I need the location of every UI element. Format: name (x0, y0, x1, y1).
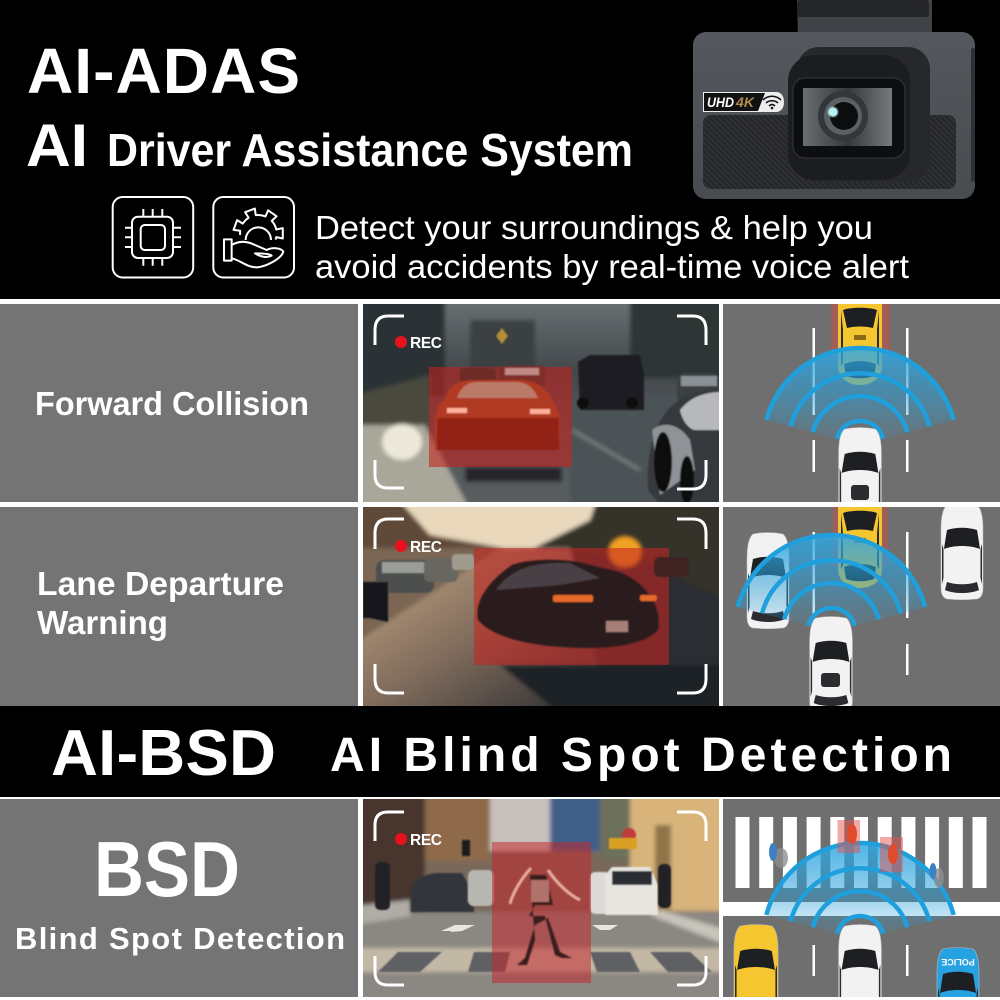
photo: rainy road forward collision (363, 304, 719, 502)
REC indicator: REC (410, 832, 442, 849)
icon: AI chip (113, 197, 193, 278)
UHD 4K label (703, 92, 784, 112)
lane markers (812, 328, 908, 472)
lane markers (812, 945, 908, 976)
orange glow (608, 536, 642, 568)
viewfinder corners (375, 316, 706, 489)
dark SUV (577, 355, 719, 410)
white car (810, 616, 852, 713)
diagram: blind spot detection (723, 799, 1000, 1000)
radar fan (738, 535, 925, 626)
radar fan (766, 348, 954, 439)
red car (435, 380, 560, 450)
dash cam product image (693, 0, 975, 199)
zebra crossing (736, 817, 986, 888)
lane markers (812, 532, 908, 675)
white car (839, 924, 881, 1000)
road arrows (441, 925, 618, 932)
REC indicator (395, 540, 442, 552)
subtitle (26, 112, 633, 179)
yellow car ahead (838, 502, 882, 588)
panel: lane departure label (0, 507, 358, 706)
photo: sunset road lane departure (363, 507, 719, 706)
REC indicator: REC (410, 335, 442, 352)
viewfinder corners (375, 519, 706, 693)
stop line (723, 902, 1000, 916)
panel: BSD label (0, 799, 358, 997)
dark car (477, 560, 659, 648)
photo: pedestrian crossing street (355, 791, 727, 1000)
icon: hand holding gear (213, 197, 294, 278)
REC indicator (395, 832, 442, 849)
title: AI-ADAS: AI-ADAS (27, 35, 300, 107)
pedestrians highlighted red (838, 820, 903, 872)
description line 2: avoid accidents by real-time voice alert (315, 248, 909, 285)
distant cars in box (460, 366, 545, 386)
street signs (462, 828, 637, 856)
radar fan (766, 843, 954, 934)
detection box: red overlay (492, 842, 591, 983)
diagram: forward collision (723, 304, 1000, 502)
viewfinder corners (375, 812, 706, 985)
photo scene (363, 304, 719, 502)
police car (937, 948, 979, 1000)
description line 1: Detect your surroundings & help you (315, 209, 873, 246)
road sign (496, 328, 508, 344)
subtitle: Driver Assistance System: Driver Assistance System (107, 124, 633, 176)
band subtitle: AI Blind Spot Detection (330, 729, 952, 782)
hatched lower panel (703, 115, 956, 189)
parked cars (411, 867, 658, 915)
pedestrians blue (769, 843, 944, 888)
panel: lane departure label: Warning (37, 604, 168, 641)
pedestrian (510, 868, 580, 965)
panel: forward collision label: Forward Collision (35, 385, 309, 422)
white car on right (941, 504, 983, 600)
UHD 4K label: 4K (735, 94, 755, 110)
band: AI-BSD heading (0, 706, 1000, 797)
panel: forward collision label (0, 304, 358, 502)
silver sports car (648, 390, 722, 505)
warning zone around yellow car (833, 507, 888, 567)
photo scene (363, 507, 719, 706)
small car (654, 557, 689, 577)
subtitle: AI: AI (26, 112, 88, 179)
yellow car ahead (838, 299, 882, 385)
parked cars (363, 554, 474, 622)
description text (315, 209, 909, 285)
lens (818, 91, 868, 141)
diagram: lane departure (723, 502, 1000, 713)
police car: POLICE (941, 957, 975, 967)
yellow car (734, 924, 778, 1000)
band title: AI-BSD: AI-BSD (51, 716, 276, 789)
photo scene (355, 791, 727, 1000)
top header panel (0, 0, 1000, 299)
REC indicator (395, 336, 442, 348)
UHD 4K label: UHD (707, 94, 734, 110)
lens housing (797, 47, 930, 182)
panel: BSD label: Blind Spot Detection (15, 921, 345, 956)
REC indicator: REC (410, 539, 442, 556)
pedestrians on the sidewalk (375, 862, 671, 910)
warning zone around yellow car (831, 304, 890, 350)
mount bracket (797, 0, 934, 40)
panel: lane departure label: Lane Departure (37, 565, 284, 602)
camera body (693, 32, 975, 199)
detection box: red overlay (474, 548, 669, 665)
detection box: red overlay (429, 367, 572, 467)
white car on left (747, 532, 789, 629)
crosswalk stripes (378, 952, 712, 972)
panel: BSD label: BSD (94, 825, 240, 913)
white car (838, 427, 882, 502)
